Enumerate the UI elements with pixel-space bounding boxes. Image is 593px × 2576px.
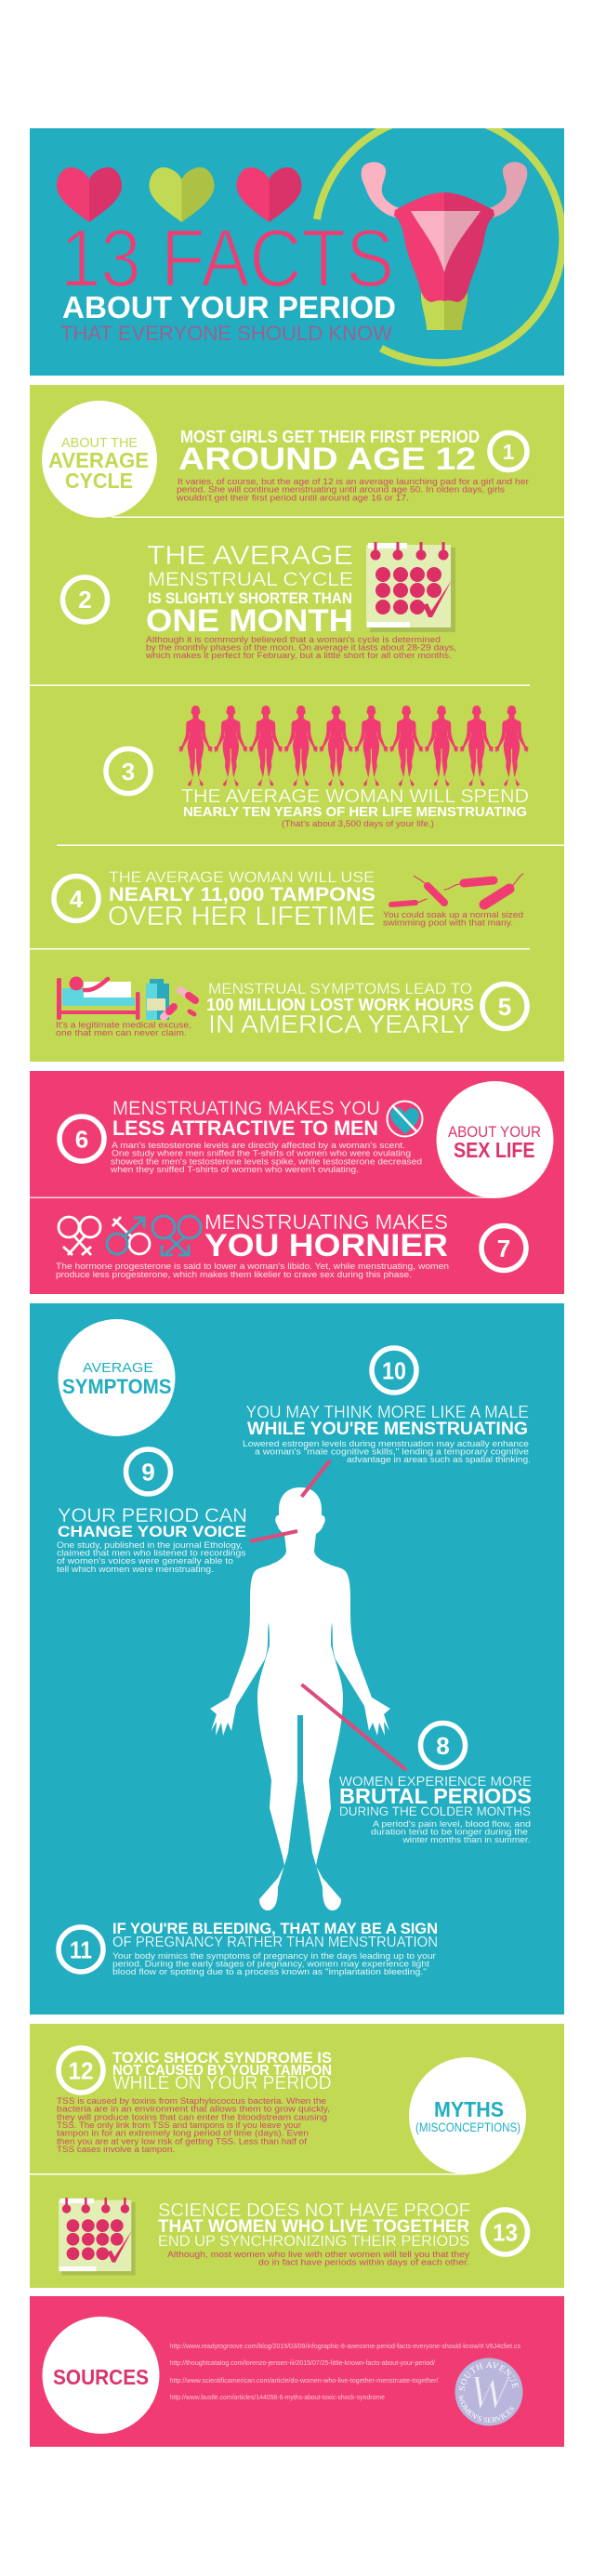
fact 7 body: The hormone progesterone is said to lower a woman's libido. Yet, while menstruating, women [56, 1262, 449, 1271]
fact 13 body: do in fact have periods within days of each other. [258, 2258, 469, 2267]
panel: header [30, 115, 564, 376]
callout line: throat [250, 1531, 297, 1541]
fact 9 body [57, 1540, 246, 1574]
fact 7: YOU HORNIER [204, 1228, 448, 1263]
icon: pink heart left [57, 167, 122, 222]
number 2 [63, 577, 108, 622]
fact 3 [106, 706, 529, 828]
section badge: myths [409, 2057, 526, 2174]
fact 6 body: when they sniffed T-shirts of women who weren't ovulating. [110, 1165, 359, 1174]
fact 6 body [110, 1141, 422, 1174]
fact 12: WHILE ON YOUR PERIOD [113, 2073, 331, 2094]
panel: about your sex life [30, 1071, 564, 1294]
icon: medicine bottle and pills [146, 979, 195, 1020]
panel: myths [30, 2024, 564, 2288]
fact 2: MENSTRUAL CYCLE [148, 569, 353, 590]
fact 7 body [56, 1262, 449, 1279]
panel: sources [30, 2296, 564, 2447]
number 10 [372, 1348, 416, 1393]
fact 10 [243, 1348, 531, 1464]
number 10: 10 [382, 1357, 406, 1385]
fact 8 body: A period's pain level, blood flow, and [373, 1819, 531, 1829]
fact 13 body: Although, most women who live with other women will tell you that they [167, 2250, 470, 2259]
fact 13: SCIENCE DOES NOT HAVE PROOF [158, 2200, 470, 2221]
icon: crossed-out heart [387, 1101, 422, 1136]
fact 6 [59, 1098, 422, 1174]
number 1: 1 [503, 440, 515, 464]
logo: South Avenue Women's Services: WOMEN'S SERVICES [459, 2395, 514, 2423]
fact 11 body: Your body mimics the symptoms of pregnancy in the days leading up to your [112, 1951, 436, 1961]
fact 9 body: tell which women were menstruating. [57, 1565, 214, 1574]
number 3 [106, 749, 151, 794]
fact 12 body: bacteria are in an environment that allows them to grow quickly, [57, 2105, 330, 2114]
fact 5 body: It's a legitimate medical excuse, [56, 1021, 191, 1030]
fact 2 [63, 541, 456, 660]
fact 5: IN AMERICA YEARLY [208, 1010, 470, 1038]
section badge: average symptoms: SYMPTOMS [62, 1375, 171, 1398]
section badge: average symptoms [58, 1319, 175, 1436]
fact 8 [339, 1724, 532, 1844]
source links: http://www.bustle.com/articles/144058-6-myths-about-toxic-shock-syndrome [169, 2395, 385, 2401]
icon: calendar [59, 2198, 136, 2275]
title: 13 FACTS [60, 212, 394, 304]
fact 2 body [145, 635, 456, 660]
fact 6 body: One study where men sniffed the T-shirts of women who were ovulating [112, 1149, 411, 1158]
fact 4 body: You could soak up a normal sized [383, 910, 523, 919]
number 11 [59, 1927, 103, 1972]
fact 5 body: one that men can never claim. [56, 1028, 187, 1037]
number 4 [54, 876, 99, 920]
fact 9 body: claimed that men who listened to recordings [57, 1549, 246, 1558]
title: THAT EVERYONE SHOULD KNOW [60, 322, 392, 345]
number 9 [126, 1449, 171, 1494]
fact 11 body [112, 1951, 436, 1976]
fact 2 body: by the monthly phases of the moon. On average it lasts about 28-29 days, [146, 643, 456, 653]
icon: uterus [362, 162, 527, 330]
number 6 [59, 1116, 104, 1161]
fact 4 body: swimming pool with that many. [383, 918, 513, 928]
fact 5: MENSTRUAL SYMPTOMS LEAD TO [208, 980, 472, 997]
fact 13: THAT WOMEN WHO LIVE TOGETHER [158, 2217, 469, 2237]
logo: South Avenue Women's Services: W [468, 2366, 513, 2419]
fact 12 body: tampon in for an extremely long period of time (days). Even [57, 2129, 309, 2138]
fact 9: YOUR PERIOD CAN [58, 1505, 247, 1526]
source links: http://www.scientificamerican.com/article/do-women-who-live-together-menstruate-together/ [169, 2378, 439, 2384]
title: ABOUT YOUR PERIOD [62, 290, 396, 324]
fact 11: OF PREGNANCY RATHER THAN MENSTRUATION [112, 1935, 438, 1950]
fact 6 body: showed the men's testosterone levels spike, while testosterone decreased [111, 1156, 422, 1166]
section badge: sources: SOURCES [53, 2365, 149, 2389]
logo: South Avenue Women's Services: SOUTH AVENUE [459, 2361, 519, 2391]
fact 12: TOXIC SHOCK SYNDROME IS [112, 2049, 332, 2067]
fact 1: AROUND AGE 12 [178, 442, 476, 477]
fact 1 body: period. She will continue menstruating until around age 50. In olden days, girls [177, 485, 506, 495]
fact 2: ONE MONTH [146, 603, 353, 639]
number 5 [482, 984, 527, 1028]
number 9: 9 [141, 1458, 155, 1486]
section badge: sources [43, 2317, 160, 2434]
icon: pink heart right [236, 167, 301, 222]
fact 10: YOU MAY THINK MORE LIKE A MALE [245, 1403, 529, 1421]
fact 12 body: they will produce toxins that can enter the bloodstream causing [57, 2112, 327, 2121]
number 12: 12 [69, 2056, 93, 2084]
number 13: 13 [493, 2218, 518, 2246]
callout line: brain [301, 1460, 330, 1497]
fact 11: IF YOU'RE BLEEDING, THAT MAY BE A SIGN [112, 1920, 438, 1937]
fact 2 body: which makes it perfect for February, but a little short for all other months. [145, 651, 452, 660]
fact 10 body [243, 1439, 531, 1464]
fact 12 body [57, 2096, 330, 2154]
fact 6: MENSTRUATING MAKES YOU [112, 1098, 380, 1119]
fact 4 [54, 868, 523, 931]
number 6: 6 [75, 1125, 88, 1153]
source links [169, 2344, 521, 2401]
panel: average symptoms [30, 1303, 564, 2015]
fact 6: LESS ATTRACTIVE TO MEN [112, 1116, 378, 1140]
fact 9: CHANGE YOUR VOICE [58, 1523, 246, 1540]
fact 8: WOMEN EXPERIENCE MORE [339, 1774, 532, 1790]
callout line: abdomen [301, 1684, 406, 1770]
number 12 [59, 2048, 103, 2093]
section badge: average symptoms: AVERAGE [83, 1360, 153, 1376]
fact 7 [56, 1210, 526, 1279]
fact 12 body: then you are at very low risk of getting TSS. Less than half of [57, 2136, 308, 2146]
number 5: 5 [498, 993, 511, 1021]
number 7: 7 [497, 1235, 510, 1262]
section badge: about the average cycle: CYCLE [65, 469, 133, 493]
fact 12 body: TSS cases involve a tampon. [57, 2145, 175, 2154]
fact 9 body: of women's voices were generally able to [57, 1556, 233, 1565]
fact 8 body [371, 1819, 531, 1844]
fact 8 body: duration tend to be longer during the [371, 1828, 528, 1837]
fact 10: WHILE YOU'RE MENSTRUATING [247, 1420, 528, 1439]
fact 10 body: a woman's "male cognitive skills," lending a temporary cognitive [255, 1447, 529, 1456]
fact 4: NEARLY 11,000 TAMPONS [109, 884, 376, 905]
section badge: about your sex life [437, 1081, 554, 1198]
number 3: 3 [122, 758, 135, 786]
fact 8: BRUTAL PERIODS [339, 1784, 532, 1808]
section badge: about the average cycle: ABOUT THE [61, 435, 138, 451]
number 4: 4 [70, 885, 84, 913]
fact 11 [59, 1920, 438, 1976]
fact 13 body [167, 2250, 470, 2267]
fact 4: THE AVERAGE WOMAN WILL USE [109, 868, 375, 886]
fact 3: THE AVERAGE WOMAN WILL SPEND [181, 786, 529, 807]
fact 13: END UP SYNCHRONIZING THEIR PERIODS [158, 2232, 469, 2250]
icon: gender symbols [59, 1216, 201, 1255]
fact 12: NOT CAUSED BY YOUR TAMPON [112, 2063, 332, 2079]
logo: South Avenue Women's Services [455, 2358, 522, 2426]
number 2: 2 [78, 586, 92, 614]
fact 7: MENSTRUATING MAKES [204, 1210, 448, 1234]
number 8: 8 [436, 1732, 450, 1760]
section badge: myths: (MISCONCEPTIONS) [415, 2120, 521, 2134]
fact 1 body: It varies, of course, but the age of 12 is an average launching pad for a girl and her [178, 477, 529, 486]
fact 1 [176, 428, 529, 502]
fact 1: MOST GIRLS GET THEIR FIRST PERIOD [180, 428, 480, 446]
fact 3 body: (That's about 3,500 days of your life.) [282, 819, 434, 828]
icon: green heart [149, 167, 214, 222]
panel: about the average cycle [30, 385, 564, 1062]
number 7 [481, 1225, 526, 1270]
fact 1 body: wouldn't get their first period until around age 16 or 17. [176, 493, 409, 502]
icon: tampons [391, 874, 523, 905]
fact 11 body: blood flow or spotting due to a process known as "implantation bleeding." [112, 1967, 427, 1976]
fact 7 body: produce less progesterone, which makes them likelier to crave sex during this phase. [56, 1270, 412, 1279]
fact 5 body [56, 1021, 191, 1037]
fact 5: 100 MILLION LOST WORK HOURS [206, 996, 474, 1014]
number 11: 11 [70, 1935, 92, 1963]
number 1 [490, 433, 527, 470]
source links: http://www.readytogroove.com/blog/2015/03/09/infographic-8-awesome-period-facts-everyone-should-know/#.V6J4cfiet.cs [169, 2344, 521, 2350]
title [60, 212, 396, 345]
number 8 [420, 1724, 465, 1768]
icon: row of ten women [178, 706, 529, 786]
number 13 [483, 2210, 528, 2254]
icon: calendar [366, 542, 455, 632]
body silhouette [210, 1487, 390, 1910]
section badge: about the average cycle: AVERAGE [48, 448, 149, 472]
fact 9 body: One study, published in the journal Ethology, [57, 1540, 243, 1550]
icon: person in bed [57, 976, 139, 1020]
decorative ring [317, 115, 562, 363]
fact 1 body [176, 477, 529, 502]
fact 13 [59, 2198, 528, 2275]
fact 5 [56, 976, 527, 1038]
fact 8 body: winter months than in summer. [402, 1835, 530, 1844]
fact 12 body: TSS is caused by toxins from Staphylococcus bacteria. When the [57, 2096, 326, 2106]
fact 4 body [383, 910, 523, 928]
fact 12 [57, 2048, 332, 2154]
fact 2: IS SLIGHTLY SHORTER THAN [148, 590, 352, 607]
fact 2 body: Although it is commonly believed that a woman's cycle is determined [146, 635, 441, 644]
fact 12 body: TSS. The only link from TSS and tampons is if you leave your [57, 2120, 301, 2130]
fact 4: OVER HER LIFETIME [108, 902, 376, 931]
section badge: about your sex life: SEX LIFE [454, 1138, 535, 1162]
fact 9 [57, 1449, 247, 1574]
fact 8: DURING THE COLDER MONTHS [339, 1803, 531, 1818]
fact 3: NEARLY TEN YEARS OF HER LIFE MENSTRUATING [183, 805, 527, 820]
fact 11 body: period. During the early stages of pregnancy, women may experience light [112, 1960, 430, 1969]
section badge: myths: MYTHS [434, 2097, 504, 2121]
source links: http://thoughtcatalog.com/lorenzo-jensen-iii/2015/07/25-little-known-facts-about-your-period/ [169, 2360, 435, 2367]
section badge: about the average cycle [42, 401, 157, 518]
fact 6 body: A man's testosterone levels are directly affected by a woman's scent. [112, 1141, 405, 1150]
fact 10 body: advantage in areas such as spatial thinking. [347, 1455, 531, 1464]
fact 2: THE AVERAGE [147, 541, 353, 571]
fact 10 body: Lowered estrogen levels during menstruation may actually enhance [243, 1439, 529, 1448]
section badge: about your sex life: ABOUT YOUR [448, 1123, 541, 1141]
